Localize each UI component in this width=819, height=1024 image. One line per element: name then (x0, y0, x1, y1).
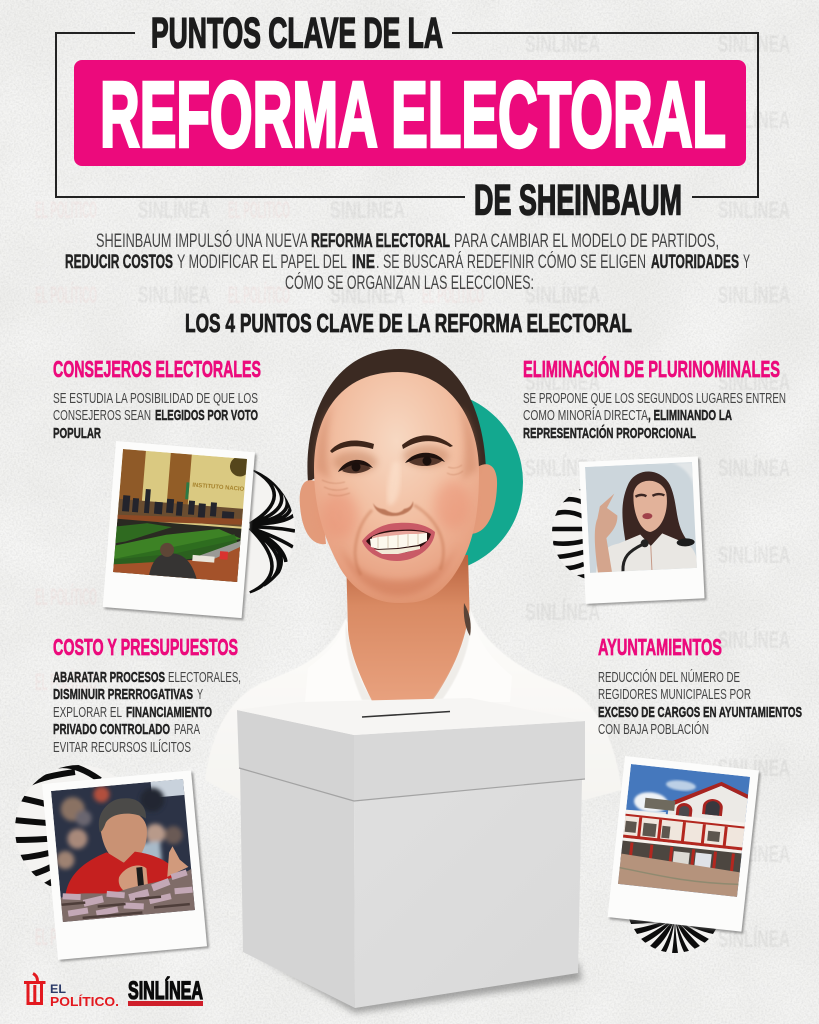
intro paragraph: INE (352, 252, 375, 273)
photo: consejo general del INE (103, 441, 257, 620)
polaroid shadow (44, 772, 209, 962)
section: ayuntamientos (598, 634, 802, 738)
intro paragraph: Y MODIFICAR EL PAPEL DEL (177, 252, 347, 273)
temple shading (316, 405, 477, 480)
background: paper texture and watermarks: SINLÍNEA (525, 368, 600, 396)
background: paper texture and watermarks: SINLÍNEA (138, 281, 210, 309)
photo: mujer con micrófono (579, 456, 707, 606)
cheeks (322, 481, 470, 539)
section: costo y presupuestos (53, 634, 241, 756)
background: paper texture and watermarks: SINLÍNEA (525, 30, 600, 58)
intro paragraph: Y (743, 252, 750, 273)
background: paper texture and watermarks: EL POLÍTICO (35, 196, 97, 224)
slot (362, 712, 450, 717)
body text: REDUCCIÓN DEL NÚMERO DE (598, 669, 740, 686)
collar shadow (346, 606, 471, 700)
spiral decoration 4 (629, 919, 716, 953)
background: paper texture and watermarks: EL POLÍTICO (228, 196, 290, 224)
intro paragraph: SHEINBAUM IMPULSÓ UNA NUEVA (96, 230, 308, 252)
body text (523, 390, 786, 442)
background: paper texture and watermarks: EL POLÍTICO (35, 583, 97, 611)
nose (373, 462, 413, 516)
box body left (240, 768, 355, 1008)
smile (362, 523, 435, 561)
nasolabial folds (355, 505, 443, 575)
photo content: INSTITUTO NACIO (192, 483, 245, 493)
polaroid frame (608, 756, 759, 932)
teal circle behind portrait (341, 391, 523, 573)
ballot box (237, 698, 585, 1013)
heading: AYUNTAMIENTOS (598, 634, 722, 660)
body text: ABARATAR PROCESOS (53, 669, 165, 686)
section: eliminación de plurinominales (523, 355, 786, 442)
logo: sinlínea: SINLÍNEA (128, 976, 203, 1005)
lid left (237, 710, 354, 801)
polaroid shadow (609, 758, 761, 934)
background: paper texture and watermarks: SINLÍNEA (138, 106, 208, 134)
body text (53, 669, 241, 756)
background: paper texture and watermarks: SINLÍNEA (525, 598, 600, 626)
face (314, 372, 479, 603)
body text: , ELIMINANDO LA (648, 407, 732, 424)
polaroid frame (579, 456, 705, 604)
title: de sheinbaum: DE SHEINBAUM (474, 176, 682, 224)
background: paper texture and watermarks: SINLÍNEA (525, 281, 600, 309)
polaroid frame (42, 770, 207, 960)
body text: EXPLORAR EL (53, 704, 122, 721)
heading: CONSEJEROS ELECTORALES (53, 356, 261, 382)
body text: FINANCIAMIENTO (126, 704, 212, 721)
background: paper texture and watermarks: SINLÍNEA (330, 196, 405, 224)
body text: CONSEJEROS SEAN (53, 407, 151, 424)
intro paragraph: REDUCIR COSTOS (65, 252, 173, 273)
photo: hombre con camisa roja y billetes (42, 770, 209, 962)
spiral decoration 2 (552, 489, 584, 578)
intro paragraph (65, 230, 750, 294)
lid right (354, 721, 585, 801)
wrinkles (322, 465, 463, 496)
intro paragraph: AUTORIDADES (651, 252, 739, 273)
body text: EVITAR RECURSOS ILÍCITOS (53, 739, 191, 756)
intro paragraph: . SE BUSCARÁ REDEFINIR CÓMO SE ELIGEN (376, 251, 646, 273)
title: puntos clave de la: PUNTOS CLAVE DE LA (151, 10, 443, 58)
background: paper texture and watermarks: EL POLÍTICO (35, 281, 97, 309)
background: paper texture and watermarks: SINLÍNEA (330, 281, 405, 309)
polaroid shadow (581, 458, 707, 606)
body text: ELEGIDOS POR VOTO (155, 407, 258, 424)
collar (305, 606, 512, 702)
body text: ELECTORALES, (168, 669, 241, 686)
neck (346, 555, 470, 701)
background: paper texture and watermarks: EL POLÍTICO (422, 281, 484, 309)
body text: PARA (174, 721, 200, 738)
spiral decoration 1 (246, 470, 295, 594)
body text (53, 390, 258, 442)
ear right (470, 464, 497, 534)
title frame (56, 33, 758, 197)
jaw and chin shading (340, 545, 458, 596)
body text: SE ESTUDIA LA POSIBILIDAD DE QUE LOS (53, 390, 258, 407)
portrait: smiling woman (205, 349, 622, 800)
body text: POPULAR (53, 425, 101, 442)
spiral decoration 3 (15, 765, 114, 886)
background: paper texture and watermarks: EL POLÍTICO (35, 668, 97, 696)
neck hair (464, 603, 471, 636)
lid top (237, 698, 585, 735)
background: paper texture and watermarks: SINLÍNEA (330, 106, 405, 134)
body text: DISMINUIR PRERROGATIVAS (53, 686, 193, 703)
logo: el político (24, 974, 119, 1009)
intro paragraph: REFORMA ELECTORAL (311, 231, 450, 252)
photo content (107, 447, 251, 583)
body text: COMO MINORÍA DIRECTA (523, 407, 648, 424)
background: paper texture and watermarks: EL POLÍTICO (228, 281, 290, 309)
photo: palacio municipal (607, 756, 761, 934)
eyes (338, 453, 445, 473)
logo: sinlínea (128, 976, 203, 1006)
background: paper texture and watermarks: SINLÍNEA (525, 196, 600, 224)
photo content (585, 461, 698, 574)
background: paper texture and watermarks: SINLÍNEA (138, 196, 210, 224)
polaroid frame (103, 441, 255, 618)
eyebrows (330, 435, 453, 453)
logo: el político: POLÍTICO. (50, 994, 119, 1009)
box body right (354, 780, 582, 1008)
body text: REPRESENTACIÓN PROPORCIONAL (523, 424, 696, 442)
polaroid shadow (104, 443, 257, 620)
ear left (300, 480, 326, 544)
body text: CON BAJA POBLACIÓN (598, 721, 709, 738)
body text: Y (197, 686, 203, 703)
background: paper texture and watermarks: EL POLÍTICO (35, 923, 97, 951)
lid seam (239, 768, 585, 801)
box shadow (240, 945, 582, 1013)
hair (307, 349, 486, 482)
eye sockets (333, 445, 449, 473)
background: paper texture and watermarks: SINLÍNEA (525, 454, 600, 482)
body text: PRIVADO CONTROLADO (53, 721, 170, 738)
photo content (49, 779, 195, 923)
logo mark (24, 974, 46, 1004)
logo: el político: EL (50, 982, 66, 996)
photo content (616, 764, 750, 898)
heading: COSTO Y PRESUPUESTOS (53, 634, 238, 660)
body text (598, 669, 802, 738)
intro paragraph: CÓMO SE ORGANIZAN LAS ELECCIONES: (285, 272, 534, 294)
shirt (205, 608, 622, 800)
section: consejeros electorales (53, 356, 261, 442)
